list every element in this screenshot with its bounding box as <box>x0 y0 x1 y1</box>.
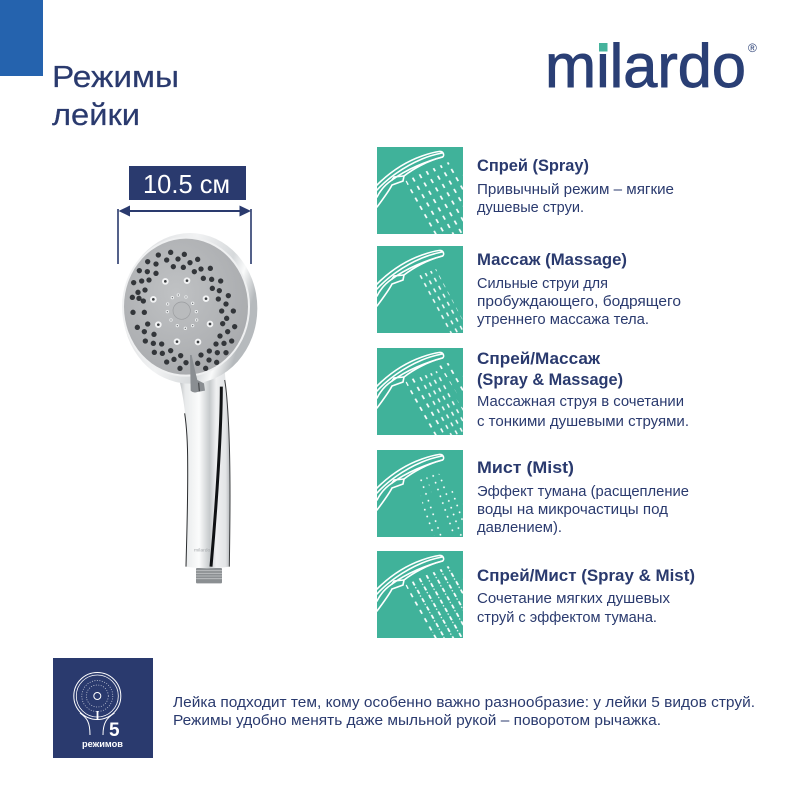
mist description <box>477 459 689 536</box>
badge: 5 modes: 5 <box>109 720 120 741</box>
panel: spray mode <box>377 147 674 234</box>
shower handle: milardo <box>194 548 211 554</box>
massage description: утреннего массажа тела. <box>477 312 649 328</box>
spray and mist description <box>477 567 695 626</box>
panel: spray and massage mode <box>377 348 689 435</box>
footer note: Режимы удобно менять даже мыльной рукой – поворотом рычажка. <box>173 713 661 729</box>
massage description: Сильные струи для <box>477 276 608 292</box>
icon: spray and massage jets <box>377 348 464 435</box>
title: Режимы <box>52 59 179 94</box>
mist description: Мист (Mist) <box>477 459 574 477</box>
corner accent block <box>0 0 43 76</box>
spray description: Привычный режим – мягкие <box>477 182 674 198</box>
spray and mist description: Сочетание мягких душевых <box>477 591 671 607</box>
massage description <box>477 251 681 328</box>
nozzles: dark rubber jets <box>130 250 237 371</box>
nozzles: center ring <box>166 294 198 329</box>
shower handle <box>177 370 230 583</box>
title: лейки <box>52 97 140 132</box>
spray description: душевые струи. <box>477 200 584 216</box>
spray and massage description: Массажная струя в сочетании <box>477 394 684 410</box>
spray and massage description: Спрей/Массаж <box>477 350 600 368</box>
icon: massage jets <box>377 246 464 333</box>
spray description <box>477 157 674 216</box>
dimension label: 10.5 cm <box>129 166 246 200</box>
spray and massage description <box>477 350 689 430</box>
title <box>52 59 179 132</box>
dimension arrow <box>117 206 252 264</box>
dimension label: 10.5 cm: 10.5 см <box>143 169 230 199</box>
badge: 5 modes: режимов <box>82 739 123 749</box>
icon: spray and mist jets <box>377 551 464 638</box>
spray and mist description: Спрей/Мист (Spray & Mist) <box>477 567 695 585</box>
shower head <box>122 233 257 392</box>
badge: 5 modes <box>53 658 153 758</box>
mist description: воды на микрочастицы под <box>477 502 668 518</box>
spray and massage description: (Spray & Massage) <box>477 371 623 389</box>
panel: mist mode <box>377 450 689 537</box>
mist description: давлением). <box>477 520 562 536</box>
spray and mist description: струй с эффектом тумана. <box>477 610 657 626</box>
spray description: Спрей (Spray) <box>477 157 589 175</box>
icon: mist jets <box>377 450 464 537</box>
massage description: Массаж (Massage) <box>477 251 627 269</box>
massage description: пробуждающего, бодрящего <box>477 294 681 310</box>
logo: milardo: milardo <box>545 32 746 100</box>
panel: spray and mist mode <box>377 551 695 638</box>
logo: milardo: ® <box>748 41 757 55</box>
mist description: Эффект тумана (расщепление <box>477 484 689 500</box>
footer note: Лейка подходит тем, кому особенно важно разнообразие: у лейки 5 видов струй. <box>173 695 755 711</box>
icon: shower head outline <box>74 672 121 735</box>
spray and massage description: с тонкими душевыми струями. <box>477 414 689 430</box>
icon: spray jets <box>377 147 464 234</box>
nozzles: chrome jets <box>151 278 212 344</box>
panel: massage mode <box>377 246 681 333</box>
footer note <box>173 695 755 729</box>
